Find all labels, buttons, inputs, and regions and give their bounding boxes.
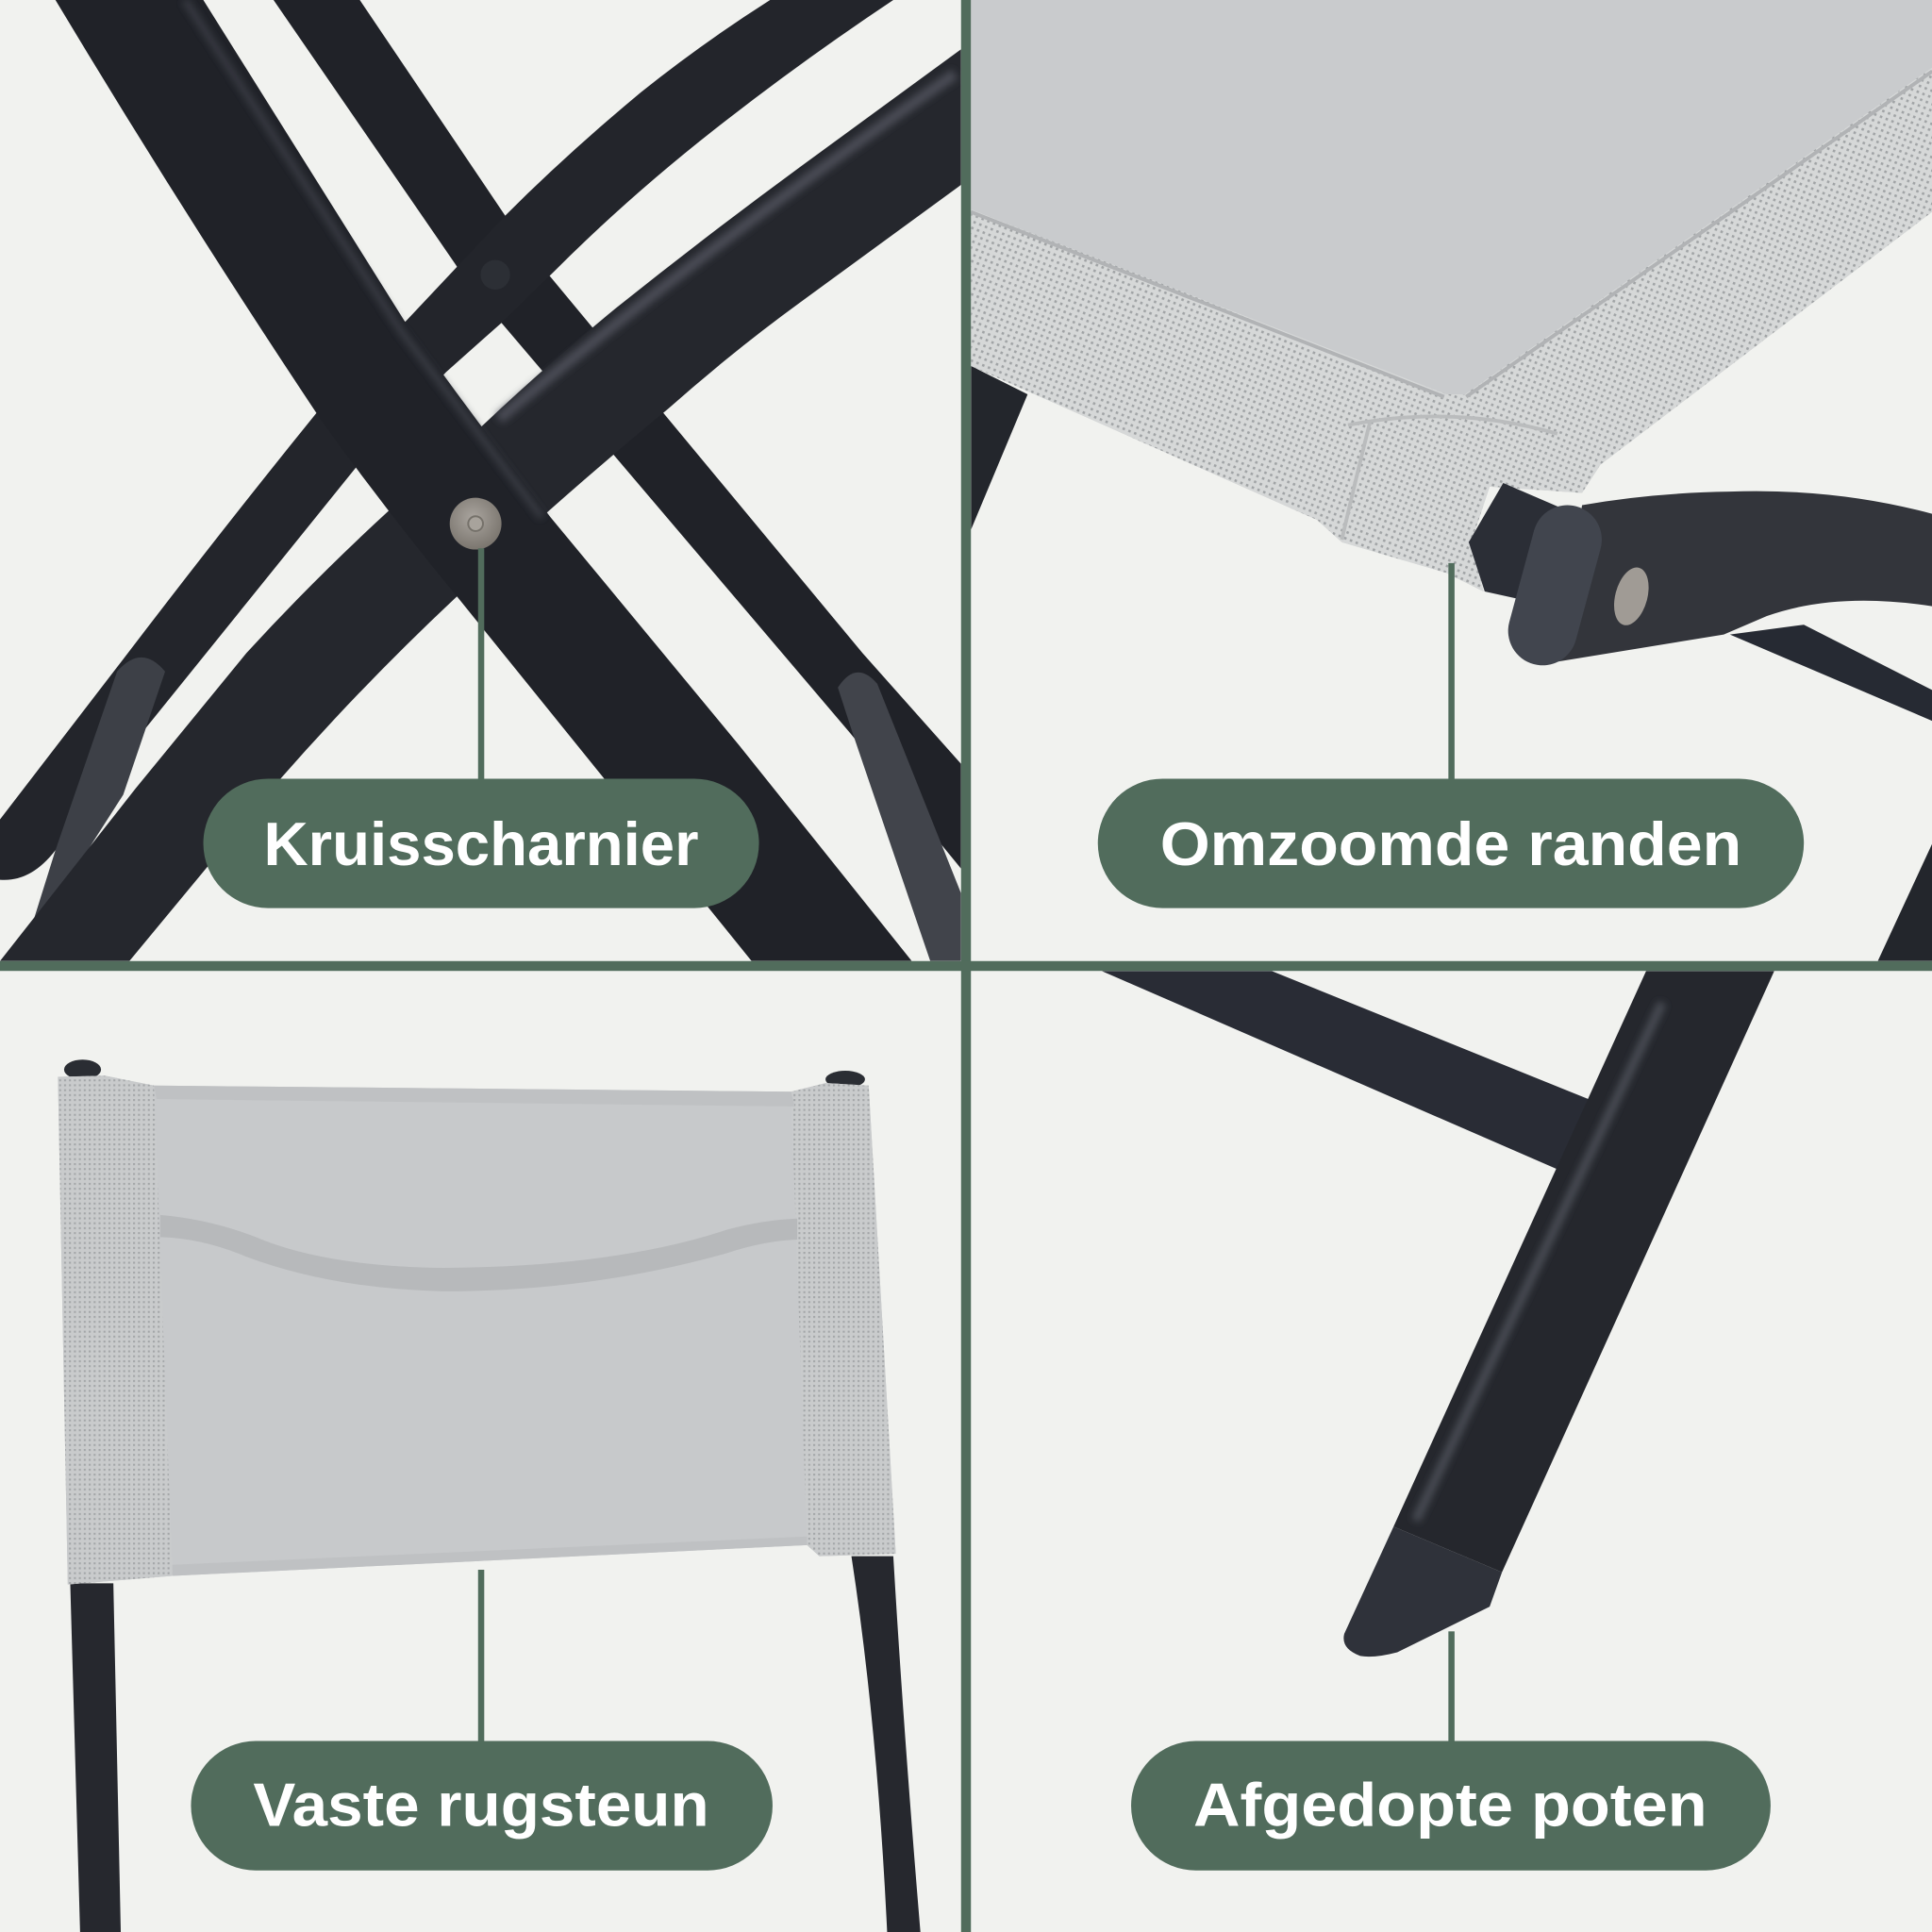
panel: Vaste rugsteun xyxy=(58,1059,921,1932)
panel: Afgedopte poten xyxy=(1102,971,1774,1657)
illustration: chair back rest xyxy=(58,1059,921,1932)
dividers xyxy=(961,0,971,1932)
callout: Afgedopte poten xyxy=(1131,1631,1771,1871)
callout: Omzoomde randen: Omzoomde randen xyxy=(1160,809,1741,878)
callout: Afgedopte poten: Afgedopte poten xyxy=(1193,1771,1707,1840)
callout: Kruisscharnier xyxy=(204,548,759,908)
callout: Vaste rugsteun xyxy=(191,1570,773,1871)
callout: Omzoomde randen xyxy=(1098,563,1804,908)
callout: Vaste rugsteun: Vaste rugsteun xyxy=(253,1771,709,1840)
callout: Kruisscharnier: Kruisscharnier xyxy=(264,809,699,878)
icon: hinge bolt xyxy=(450,498,502,550)
illustration: seat fabric with hem xyxy=(971,0,1932,961)
illustration: crossed chair frame xyxy=(0,0,961,961)
panel: Omzoomde randen xyxy=(971,0,1932,961)
illustration: capped chair leg xyxy=(1102,971,1774,1657)
panel: Kruisscharnier xyxy=(0,0,961,961)
